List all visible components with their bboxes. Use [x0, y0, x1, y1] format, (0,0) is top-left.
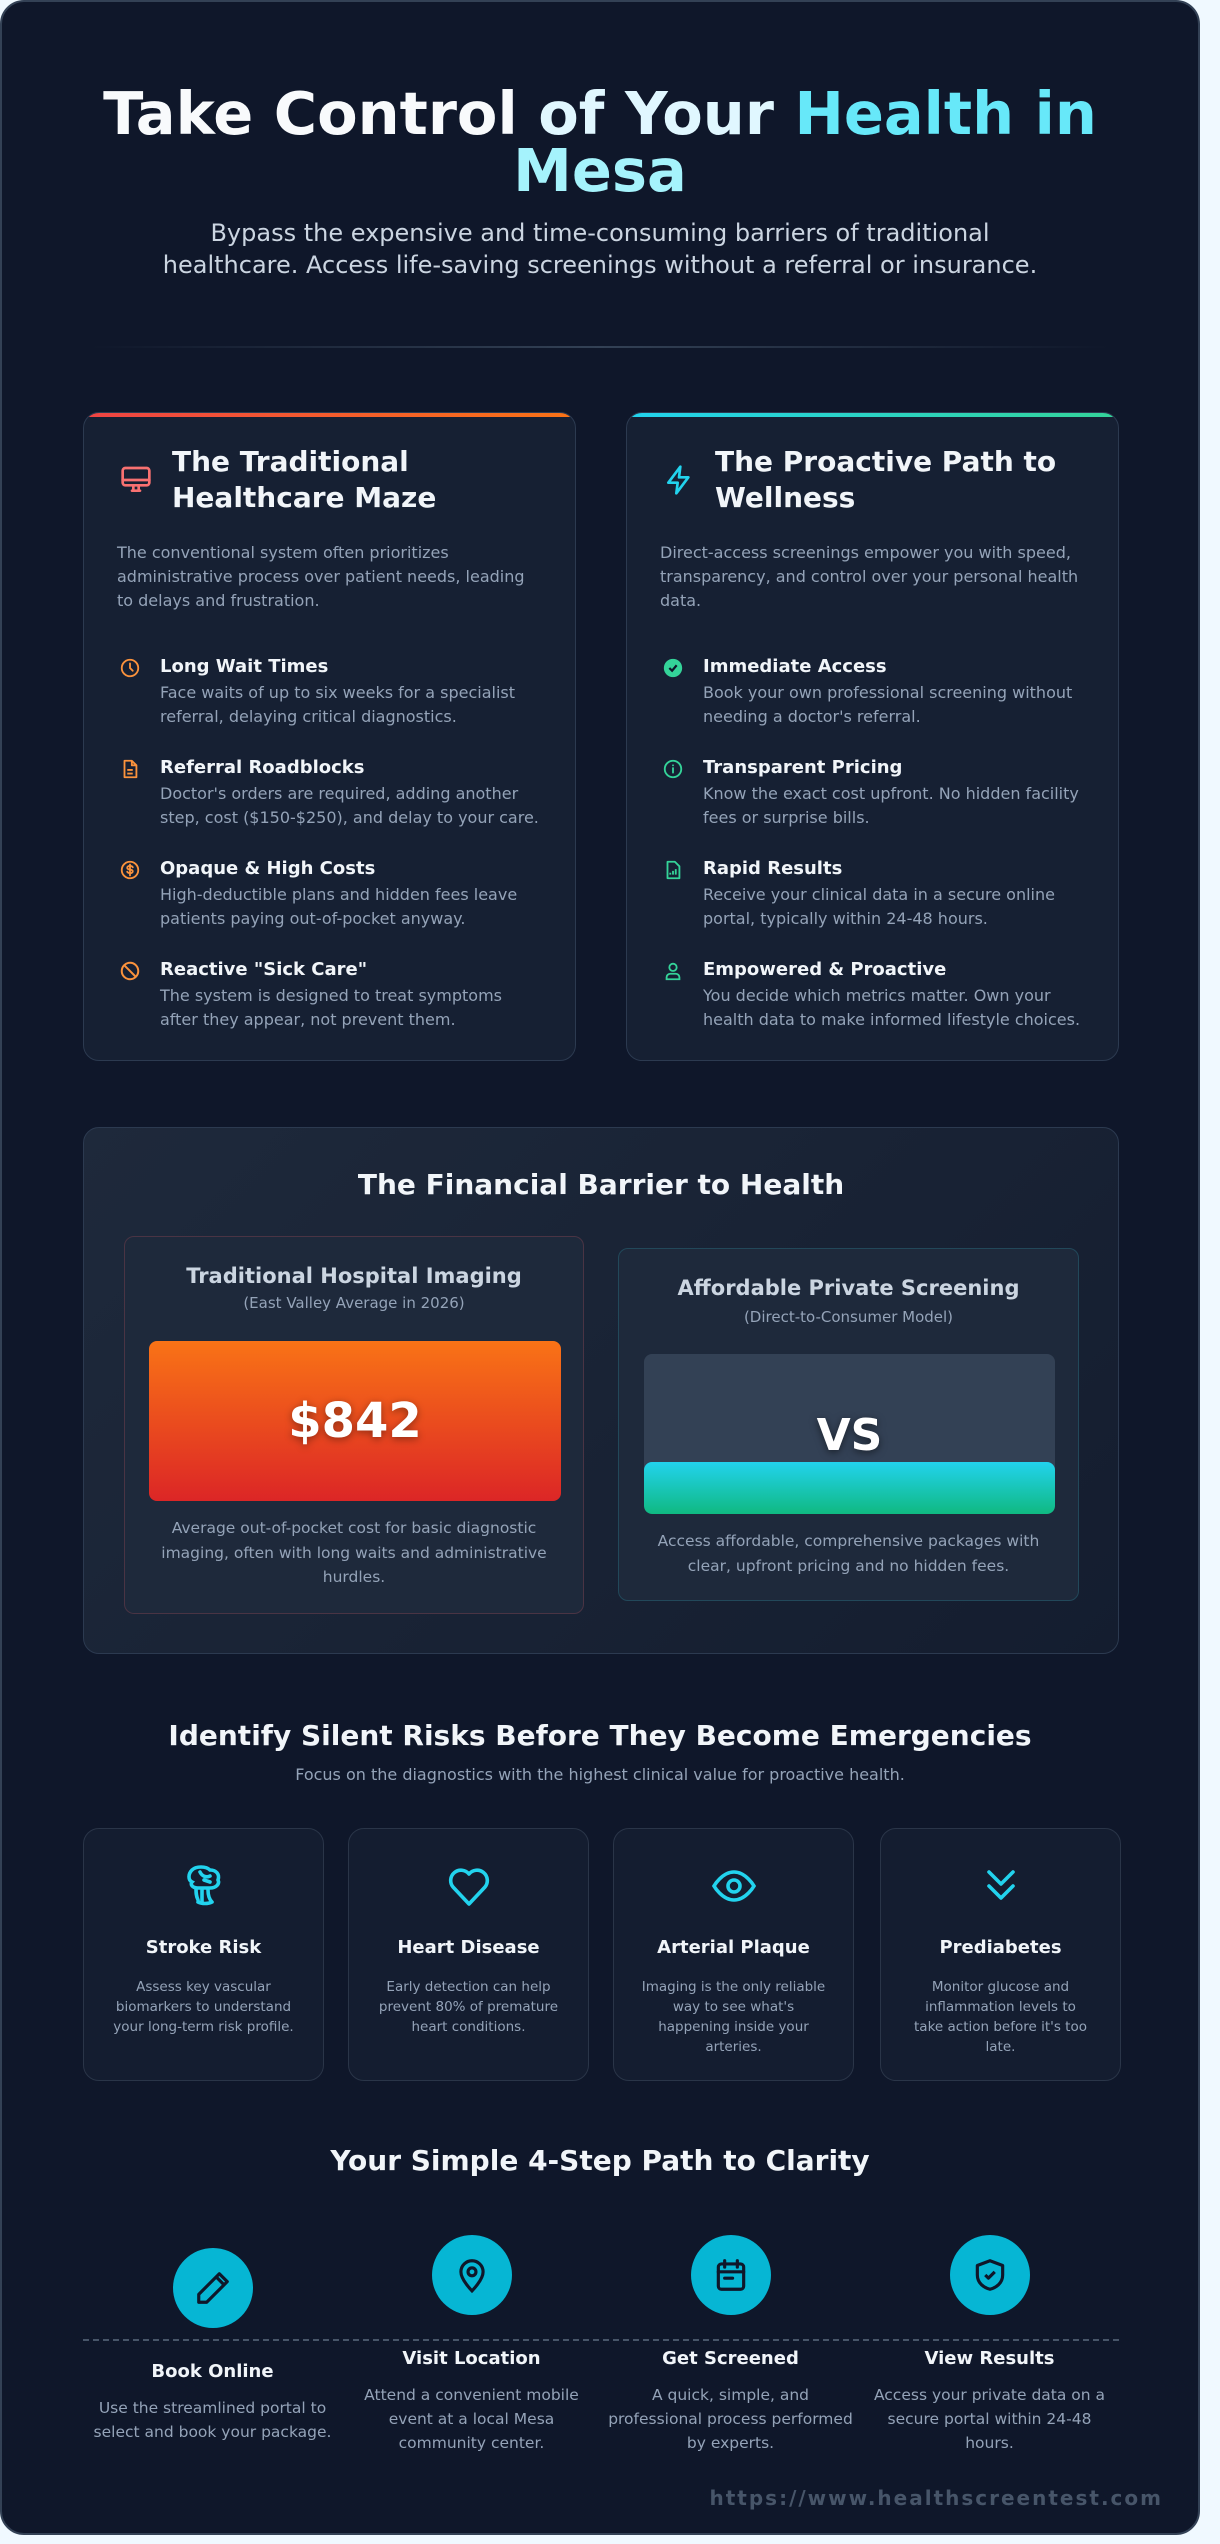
- bar: $842: $842: [288, 1393, 422, 1449]
- step 4: view results: secure portal within 24-48: [888, 2410, 1091, 2428]
- step 2: visit location: [364, 2235, 579, 2452]
- risk card: prediabetes: inflammation levels to: [925, 1999, 1076, 2015]
- heading: silent risks: Identify Silent Risks Before They Become Emergencies: [168, 1719, 1032, 1752]
- risk card: plaque: happening inside your: [658, 2019, 809, 2035]
- risk card: heart: [348, 1828, 589, 2081]
- risk card: plaque: Arterial Plaque: [657, 1937, 810, 1958]
- step 4: view results: Access your private data on a: [874, 2386, 1105, 2404]
- description: data.: [660, 591, 701, 610]
- risk card: plaque: Imaging is the only reliable: [642, 1979, 825, 1995]
- description: Direct-access screenings empower you with speed,: [660, 543, 1071, 562]
- card: traditional hospital imaging: hurdles.: [323, 1568, 385, 1586]
- icon: lightning: [666, 465, 690, 495]
- card: affordable private screening: clear, upfront pricing and no hidden fees.: [688, 1557, 1009, 1575]
- card: affordable private screening: Access affordable, comprehensive packages with: [658, 1532, 1039, 1550]
- subheading: Focus on the diagnostics with the highest clinical value for proactive health.: [295, 1765, 905, 1784]
- step 1: book online: Use the streamlined portal to: [99, 2399, 326, 2417]
- panel: traditional healthcare maze: after they appear, not prevent them.: [160, 1010, 456, 1029]
- card: traditional hospital imaging: (East Valley Average in 2026): [243, 1294, 465, 1312]
- risk card: heart: Early detection can help: [386, 1979, 551, 1995]
- panel: traditional healthcare maze: Long Wait Times: [160, 656, 328, 677]
- step 4: view results: [874, 2235, 1105, 2452]
- risk card: stroke: biomarkers to understand: [116, 1999, 291, 2015]
- risk card: prediabetes: Monitor glucose and: [932, 1979, 1069, 1995]
- icon: monitor: [121, 466, 151, 492]
- panel: financial barrier: [83, 1127, 1119, 1654]
- card: traditional hospital imaging: [124, 1236, 584, 1614]
- risk card: prediabetes: [880, 1828, 1121, 2081]
- panel: proactive path: fees or surprise bills.: [703, 808, 870, 827]
- heading: Wellness: [715, 481, 855, 514]
- panel: traditional healthcare maze: step, cost ($150-$250), and delay to your care.: [160, 808, 539, 827]
- panel: proactive path: Rapid Results: [703, 858, 842, 879]
- heading: [715, 445, 1056, 514]
- bar: vs comparison: [644, 1354, 1055, 1514]
- step 3: get screened: [608, 2235, 853, 2452]
- title: [103, 79, 1097, 205]
- risk card: stroke: your long-term risk profile.: [113, 2019, 294, 2035]
- panel: proactive path: Book your own professional screening without: [703, 683, 1072, 702]
- risk card: stroke: [83, 1828, 324, 2081]
- step 3: get screened: Get Screened: [662, 2348, 799, 2369]
- panel: traditional healthcare maze: Face waits of up to six weeks for a specialist: [160, 683, 515, 702]
- risk card: plaque: [613, 1828, 854, 2081]
- panel: proactive path: You decide which metrics matter. Own your: [703, 986, 1051, 1005]
- panel: proactive path: needing a doctor's referral.: [703, 707, 921, 726]
- subtitle: [163, 219, 1037, 279]
- panel: traditional healthcare maze: [83, 412, 576, 1061]
- title: Mesa: [513, 136, 687, 205]
- risk card: stroke: Assess key vascular: [136, 1979, 271, 1995]
- item: transparent pricing: [664, 757, 1079, 827]
- risk card: prediabetes: late.: [986, 2039, 1015, 2055]
- step 4: view results: View Results: [924, 2348, 1054, 2369]
- panel: traditional healthcare maze: Doctor's orders are required, adding another: [160, 784, 518, 803]
- step 2: visit location: Attend a convenient mobile: [364, 2386, 579, 2404]
- panel: proactive path: [626, 412, 1119, 1061]
- panel: proactive path: Immediate Access: [703, 656, 887, 677]
- description: to delays and frustration.: [117, 591, 320, 610]
- item: rapid results: [666, 858, 1055, 928]
- panel: traditional healthcare maze: referral, delaying critical diagnostics.: [160, 707, 457, 726]
- risk card: heart: Heart Disease: [397, 1937, 540, 1958]
- item: long wait times: [120, 656, 515, 726]
- description: administrative process over patient needs, leading: [117, 567, 525, 586]
- card: traditional hospital imaging: Traditional Hospital Imaging: [186, 1264, 522, 1288]
- heading: [172, 445, 436, 514]
- step 1: book online: [94, 2248, 331, 2441]
- panel: proactive path: portal, typically within 24-48 hours.: [703, 909, 988, 928]
- card: affordable private screening: Affordable Private Screening: [678, 1276, 1019, 1300]
- step 3: get screened: A quick, simple, and: [652, 2386, 809, 2404]
- panel: traditional healthcare maze: patients paying out-of-pocket anyway.: [160, 909, 465, 928]
- risk card: plaque: way to see what's: [673, 1999, 794, 2015]
- bar: vs comparison: VS: [817, 1410, 882, 1461]
- heading: The Proactive Path to: [715, 445, 1056, 478]
- subtitle: Bypass the expensive and time-consuming barriers of traditional: [210, 219, 990, 247]
- heading: Healthcare Maze: [172, 481, 436, 514]
- card: affordable private screening: [618, 1248, 1079, 1601]
- step 3: get screened: professional process performed: [608, 2410, 853, 2428]
- description: [660, 543, 1078, 610]
- subtitle: healthcare. Access life-saving screenings without a referral or insurance.: [163, 251, 1037, 279]
- item: immediate access: [664, 656, 1072, 726]
- panel: proactive path: Transparent Pricing: [703, 757, 902, 778]
- panel: proactive path: health data to make informed lifestyle choices.: [703, 1010, 1080, 1029]
- risk card: plaque: arteries.: [705, 2039, 762, 2055]
- risk card: prediabetes: take action before it's too: [914, 2019, 1087, 2035]
- heading: The Financial Barrier to Health: [358, 1168, 844, 1201]
- panel: traditional healthcare maze: Referral Roadblocks: [160, 757, 364, 778]
- risk card: prediabetes: Prediabetes: [939, 1937, 1062, 1958]
- step 3: get screened: by experts.: [687, 2434, 774, 2452]
- step 2: visit location: Visit Location: [402, 2348, 541, 2369]
- risk card: stroke: Stroke Risk: [146, 1937, 261, 1958]
- title: Take Control of Your Health in: [103, 79, 1097, 148]
- panel: proactive path: Empowered & Proactive: [703, 959, 946, 980]
- footer url: https://www.healthscreentest.com: [709, 2486, 1163, 2510]
- heading: 4-step path: Your Simple 4-Step Path to Clarity: [330, 2144, 870, 2177]
- step 1: book online: select and book your package.: [94, 2423, 331, 2441]
- description: The conventional system often prioritizes: [117, 543, 449, 562]
- card: traditional hospital imaging: Average out-of-pocket cost for basic diagnostic: [172, 1519, 536, 1537]
- step 2: visit location: event at a local Mesa: [389, 2410, 554, 2428]
- panel: traditional healthcare maze: The system is designed to treat symptoms: [160, 986, 502, 1005]
- bar: $842: [149, 1341, 561, 1501]
- panel: proactive path: Know the exact cost upfront. No hidden facility: [703, 784, 1079, 803]
- step 1: book online: Book Online: [151, 2361, 274, 2382]
- step 4: view results: hours.: [965, 2434, 1014, 2452]
- step 2: visit location: community center.: [399, 2434, 544, 2452]
- card: traditional hospital imaging: imaging, often with long waits and administrative: [161, 1544, 547, 1562]
- item: reactive sick care: [120, 959, 502, 1029]
- description: transparency, and control over your personal health: [660, 567, 1078, 586]
- card: affordable private screening: (Direct-to-Consumer Model): [744, 1308, 953, 1326]
- risk card: heart: prevent 80% of premature: [379, 1999, 558, 2015]
- panel: traditional healthcare maze: High-deductible plans and hidden fees leave: [160, 885, 517, 904]
- item: empowered: [666, 959, 1080, 1029]
- panel: traditional healthcare maze: Opaque & High Costs: [160, 858, 375, 879]
- item: referral roadblocks: [124, 757, 539, 827]
- item: opaque high costs: [120, 858, 517, 928]
- description: [116, 543, 525, 610]
- heading: The Traditional: [172, 445, 409, 478]
- panel: traditional healthcare maze: Reactive "Sick Care": [160, 959, 367, 980]
- risk card: heart: heart conditions.: [411, 2019, 526, 2035]
- panel: proactive path: Receive your clinical data in a secure online: [703, 885, 1055, 904]
